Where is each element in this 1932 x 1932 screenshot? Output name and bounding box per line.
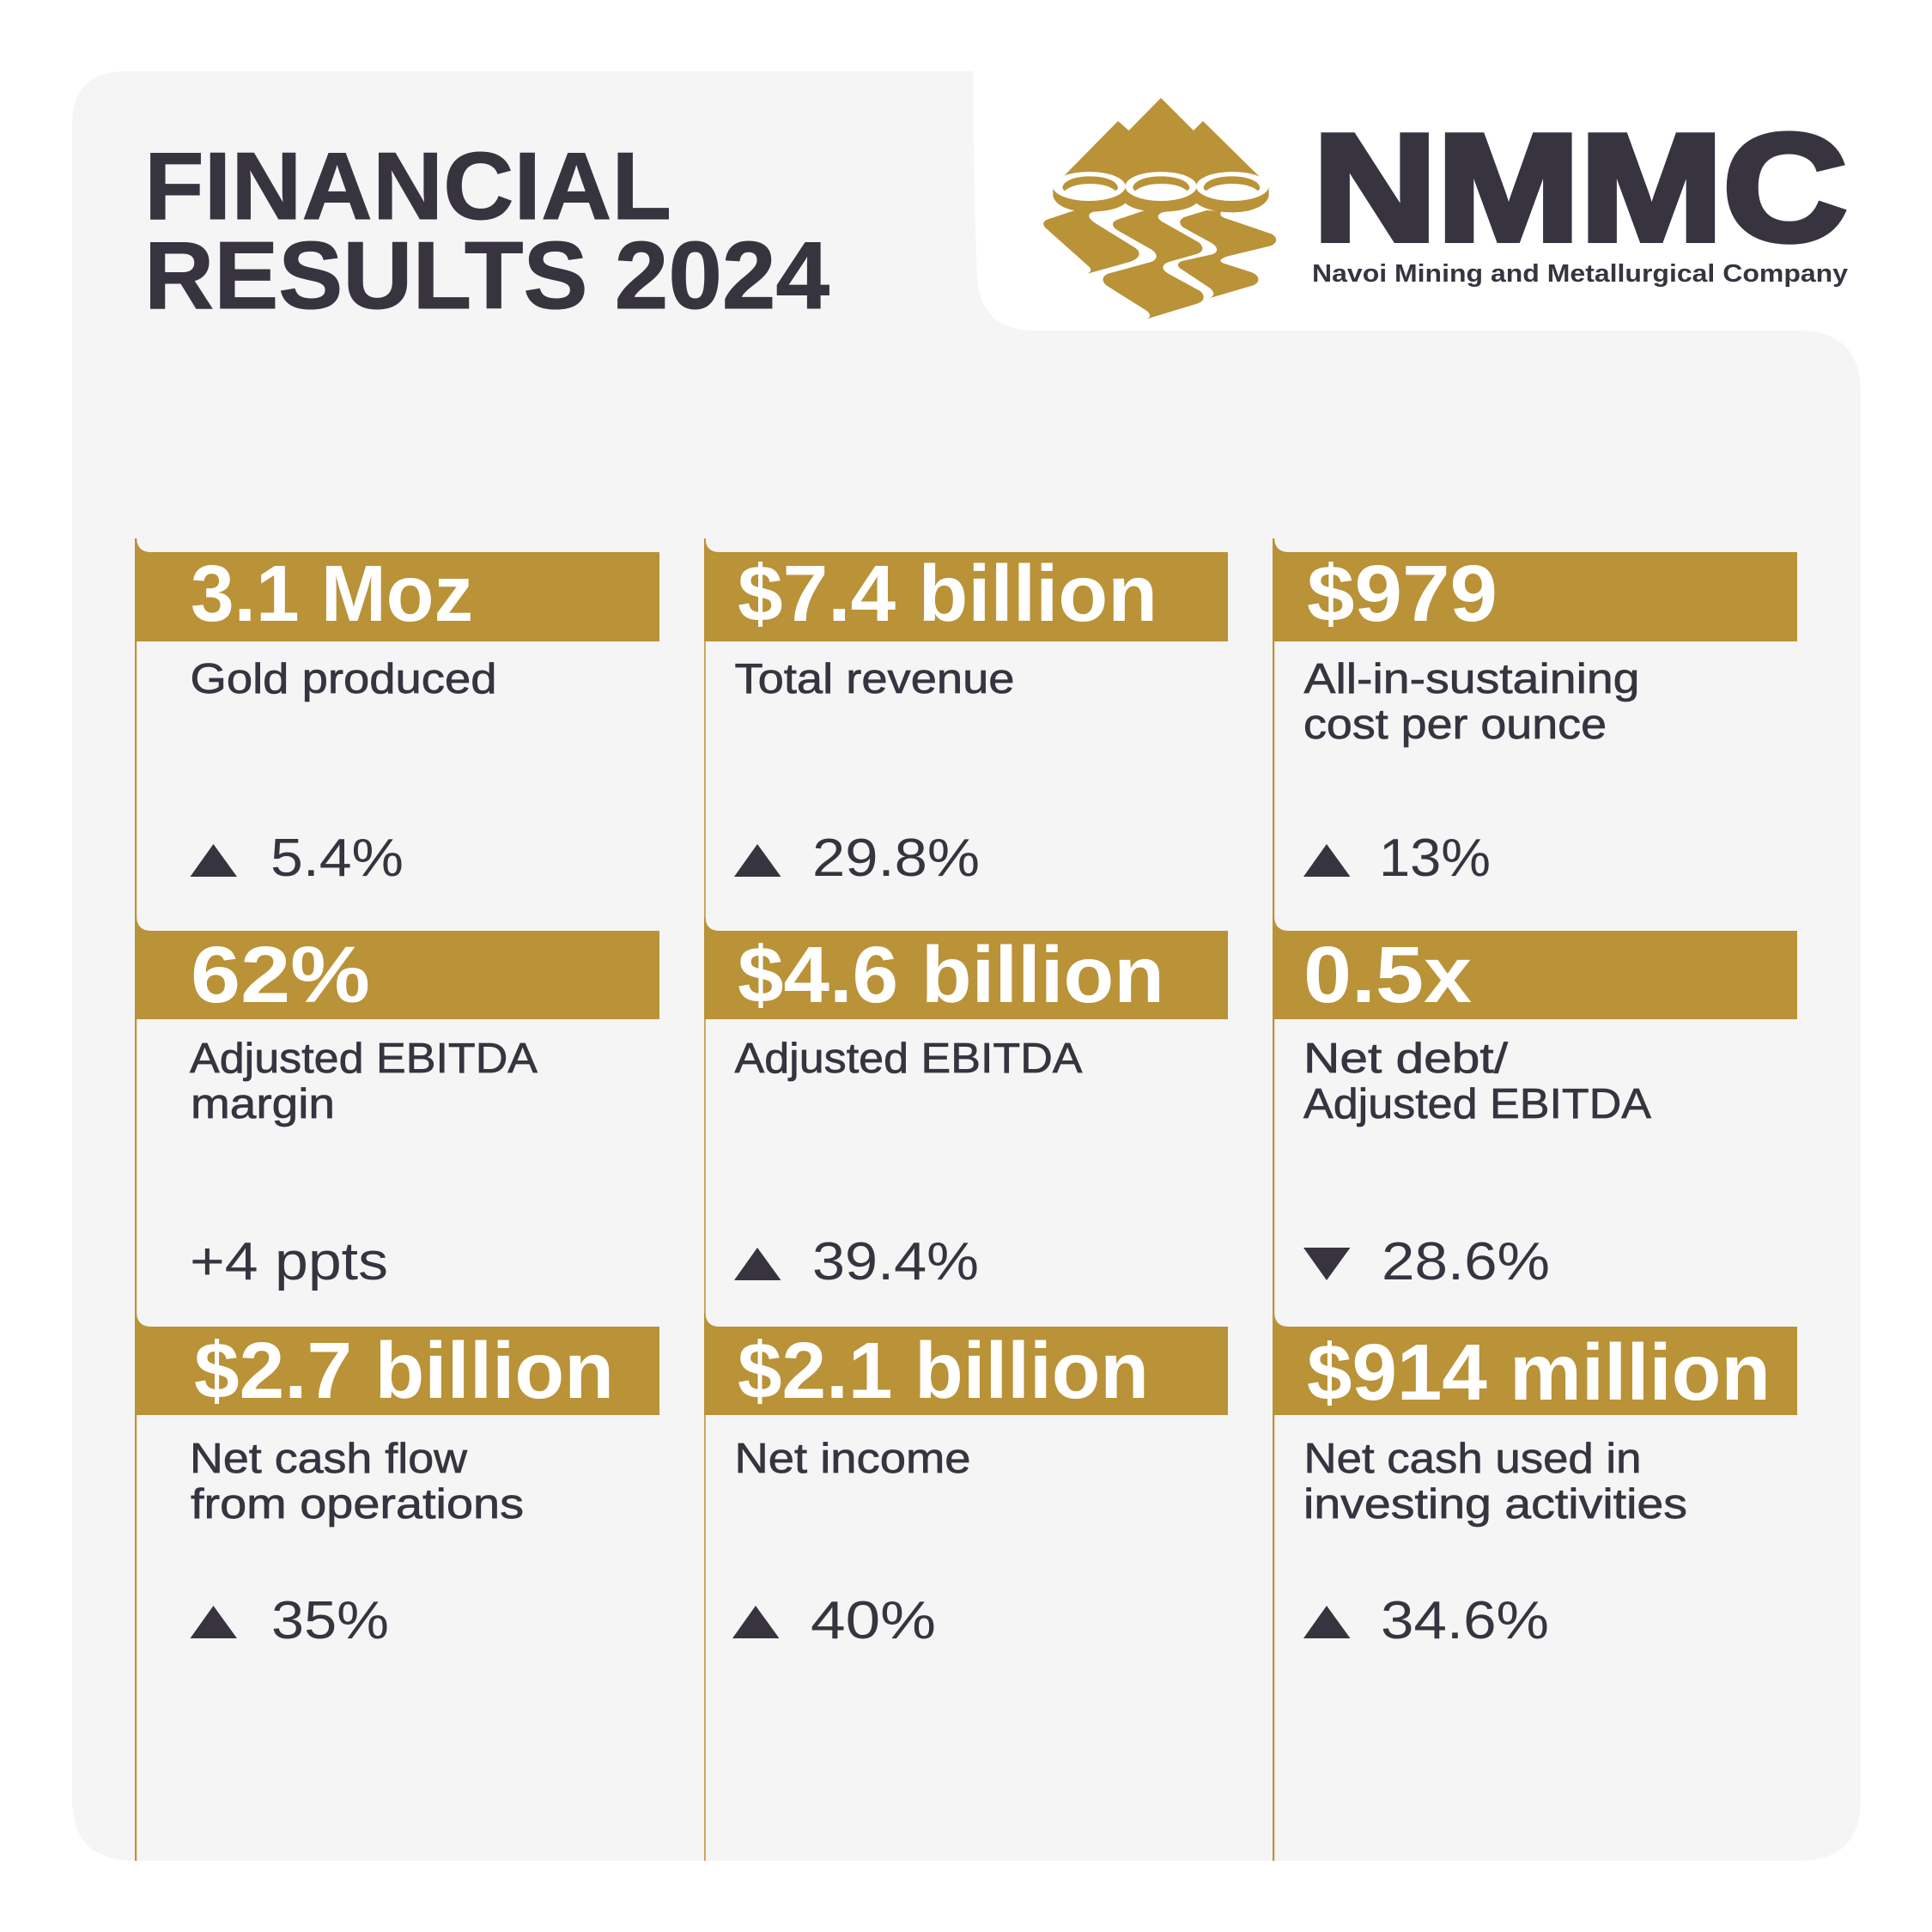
value bar [704,538,1228,641]
card: net cash flow: from operations [191,1480,524,1528]
logo wordmark: NMMC [1313,103,1847,273]
card: net debt ratio [1273,917,1797,1291]
label: Total revenue [735,655,1015,702]
change: 5.4% [270,829,404,888]
label: Adjusted EBITDA [190,1035,538,1082]
column rule: col 3 [1273,538,1274,1861]
card: EBITDA margin [135,917,659,1291]
title: RESULTS 2024 [144,222,829,329]
card: total revenue [704,538,1228,888]
value: $4.6 billion [738,930,1164,1019]
value: $2.7 billion [194,1326,614,1415]
value: $979 [1307,549,1498,638]
label: Net debt/ [1303,1035,1508,1082]
icon: up arrow [732,1606,780,1638]
value bar [1273,538,1797,641]
column rule: col 1 [135,538,137,1861]
label: Net cash used in [1303,1435,1642,1482]
label: Adjusted EBITDA [735,1035,1082,1082]
icon: up arrow [734,1248,781,1280]
icon: up arrow [191,844,237,877]
value bar [135,917,659,1019]
value bar [1273,917,1797,1019]
column rule: col 2 [704,538,706,1861]
change: +4 ppts [190,1232,388,1291]
change: 28.6% [1382,1232,1550,1291]
value bar [704,917,1228,1019]
card: net debt ratio: Adjusted EBITDA [1303,1080,1651,1127]
change: 39.4% [812,1232,979,1291]
label: All-in-sustaining [1303,655,1640,702]
icon: up arrow [191,1606,237,1638]
value: 0.5x [1303,930,1472,1019]
card: investing activities [1273,1313,1797,1650]
card: investing activities: investing activities [1303,1480,1687,1528]
label: Net income [735,1435,970,1482]
card: net cash flow [135,1313,659,1650]
card: net income [704,1313,1228,1650]
change: 29.8% [812,829,980,888]
label: Net cash flow [190,1435,467,1482]
change: 35% [271,1591,389,1650]
icon: up arrow [1303,1606,1350,1638]
title [144,133,829,329]
icon: down arrow [1303,1248,1350,1280]
card: all-in-sustaining cost: cost per ounce [1303,701,1607,748]
value bar [135,1313,659,1415]
value: $7.4 billion [738,549,1157,638]
logo wordmark: Navoi Mining and Metallurgical Company [1312,260,1848,288]
card: all-in-sustaining cost [1273,538,1797,888]
value: $2.1 billion [738,1326,1149,1415]
change: 13% [1379,829,1491,888]
title: FINANCIAL [144,133,671,240]
change: 40% [811,1591,936,1650]
value bar [1273,1313,1797,1415]
value: 3.1 Moz [191,549,473,638]
card: EBITDA margin: margin [191,1080,335,1127]
card: gold produced [135,538,659,888]
icon: up arrow [734,844,781,877]
card: adjusted EBITDA [704,917,1228,1291]
change: 34.6% [1381,1591,1549,1650]
icon: up arrow [1303,844,1350,877]
value bar [135,538,659,641]
label: Gold produced [191,655,496,702]
value: $914 million [1307,1327,1771,1417]
value: 62% [191,930,370,1019]
logo emblem [1043,98,1276,320]
value bar [704,1313,1228,1415]
